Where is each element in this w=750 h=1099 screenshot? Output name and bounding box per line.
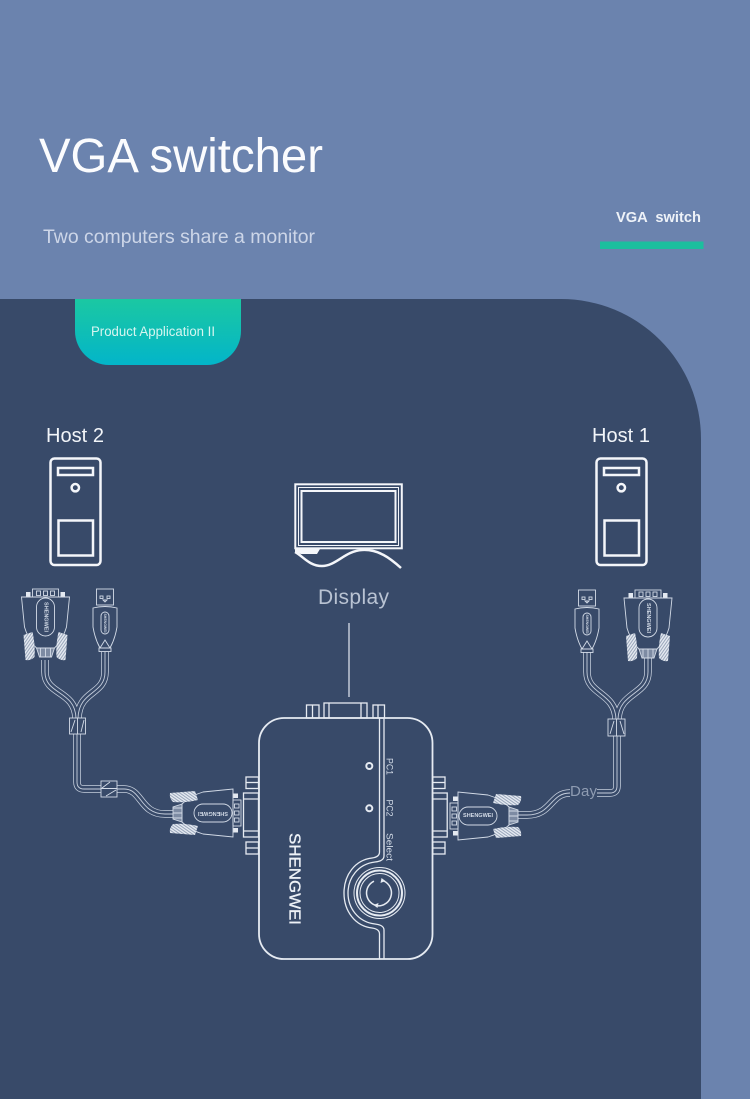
VGA plug host end	[22, 589, 70, 660]
tag underline	[600, 242, 704, 249]
label: Host 1: Host 1	[592, 425, 650, 447]
USB plug: SHENGWEI	[103, 613, 107, 633]
VGA plug switch end	[170, 789, 241, 837]
cable assembly: host 2	[22, 589, 241, 837]
cable collar horizontal	[101, 781, 117, 797]
line from display to switcher	[348, 623, 350, 697]
icon: host 2 computer tower	[50, 458, 100, 565]
PC2 LED	[366, 805, 372, 811]
right VGA port	[433, 777, 447, 854]
VGA switcher box	[244, 703, 447, 959]
PC1 LED	[366, 763, 372, 769]
tag: VGA switch	[600, 210, 704, 249]
brand: SHENGWEI: SHENGWEI	[286, 833, 302, 925]
select button	[354, 868, 405, 918]
title: VGA switcher	[39, 130, 323, 183]
label: PC2: PC2	[384, 800, 394, 816]
VGA plug switch end: SHENGWEI	[198, 810, 228, 816]
label: PC1: PC1	[384, 758, 394, 775]
USB plug: SHENGWEI	[585, 614, 589, 634]
icon: display monitor	[295, 484, 402, 568]
subtitle: Two computers share a monitor	[43, 226, 315, 248]
badge label: Product Application II	[91, 324, 215, 339]
dark main panel	[0, 299, 701, 1099]
body seam around button	[344, 718, 384, 959]
label: Display: Display	[318, 586, 390, 609]
USB plug	[575, 590, 599, 652]
tag: VGA switch: VGA switch	[616, 210, 701, 226]
VGA plug host end	[624, 590, 672, 661]
icon: host 1 computer tower	[596, 458, 646, 565]
watermark: Day: Day	[570, 783, 598, 800]
VGA plug host end: SHENGWEI	[42, 602, 48, 632]
VGA plug switch end: SHENGWEI	[463, 813, 493, 819]
VGA plug host end: SHENGWEI	[645, 603, 651, 633]
section badge	[75, 299, 241, 365]
VGA plug switch end	[450, 792, 521, 840]
USB plug	[93, 589, 117, 652]
cable paths	[45, 652, 178, 814]
cable paths	[514, 652, 648, 815]
top VGA port	[306, 703, 384, 718]
cable collar vertical	[608, 719, 625, 736]
left VGA port	[244, 777, 258, 854]
cable assembly: host 1	[450, 590, 672, 840]
label: Host 2: Host 2	[46, 425, 104, 447]
cable collar vertical	[70, 718, 86, 734]
switcher body	[259, 718, 432, 959]
label: Select: Select	[384, 833, 394, 861]
